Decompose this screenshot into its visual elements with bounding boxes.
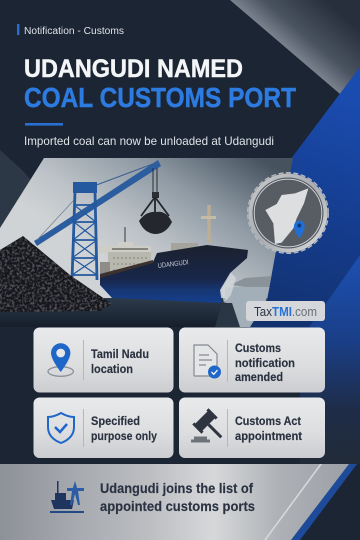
card text: Customs Act bbox=[235, 414, 301, 428]
card text: appointment bbox=[235, 429, 302, 443]
grab bucket bbox=[139, 192, 172, 234]
card text bbox=[91, 347, 149, 376]
top right silver wedge bbox=[230, 0, 360, 94]
boom bbox=[34, 160, 161, 246]
title: COAL CUSTOMS PORT bbox=[24, 82, 296, 113]
crane bbox=[34, 160, 161, 280]
title bbox=[24, 55, 296, 113]
icon: map pin bbox=[48, 343, 73, 376]
card text: Specified bbox=[91, 414, 140, 428]
card: Customs Act appointment bbox=[179, 398, 325, 458]
card text: purpose only bbox=[91, 429, 157, 443]
icon: shield with check bbox=[48, 413, 74, 443]
location pin bbox=[294, 221, 305, 239]
card text: location bbox=[91, 362, 133, 376]
card: Specified purpose only bbox=[34, 398, 174, 458]
icon: gavel bbox=[191, 408, 229, 445]
card: Tamil Nadu location bbox=[34, 328, 174, 392]
icon: document with check bbox=[194, 345, 221, 378]
photo: port scene bbox=[0, 158, 300, 330]
card: Customs notification amended bbox=[179, 328, 325, 392]
hoist cables bbox=[153, 168, 157, 194]
blue diagonal panel bbox=[245, 67, 360, 340]
card text bbox=[235, 414, 302, 443]
title rule bbox=[25, 123, 63, 126]
coal pile bbox=[0, 236, 112, 312]
card text bbox=[235, 341, 295, 384]
banner text: Udangudi joins the list of bbox=[100, 480, 253, 496]
Tamil Nadu shape bbox=[265, 188, 308, 244]
title: UDANGUDI NAMED bbox=[24, 55, 243, 83]
icon: port ship and crane bbox=[50, 481, 84, 513]
distant shore bbox=[231, 276, 272, 288]
banner text: appointed customs ports bbox=[100, 498, 255, 514]
banner text bbox=[100, 480, 255, 514]
card text: Tamil Nadu bbox=[91, 347, 149, 361]
eyebrow label: Notification - Customs bbox=[24, 26, 124, 37]
ship bow highlight bbox=[221, 273, 236, 303]
card text: Customs bbox=[235, 341, 281, 355]
tower bbox=[72, 192, 97, 280]
subtitle: Imported coal can now be unloaded at Udangudi bbox=[24, 134, 274, 148]
logo: TaxTMI.com: TaxTMI.com bbox=[254, 304, 317, 319]
bottom banner bbox=[0, 464, 357, 540]
left dark facet bbox=[0, 150, 33, 232]
card text: notification bbox=[235, 356, 295, 370]
deck edge bbox=[100, 260, 153, 278]
ship hull bbox=[100, 245, 248, 303]
ship name: UDANGUDI bbox=[157, 259, 189, 270]
superstructure bbox=[99, 205, 216, 274]
badge: Tamil Nadu map bbox=[248, 173, 328, 253]
lower right fading blue panel bbox=[300, 255, 360, 464]
card text: amended bbox=[235, 370, 283, 384]
logo: TaxTMI.com bbox=[246, 301, 325, 321]
water bbox=[0, 298, 268, 327]
card text bbox=[91, 414, 157, 443]
